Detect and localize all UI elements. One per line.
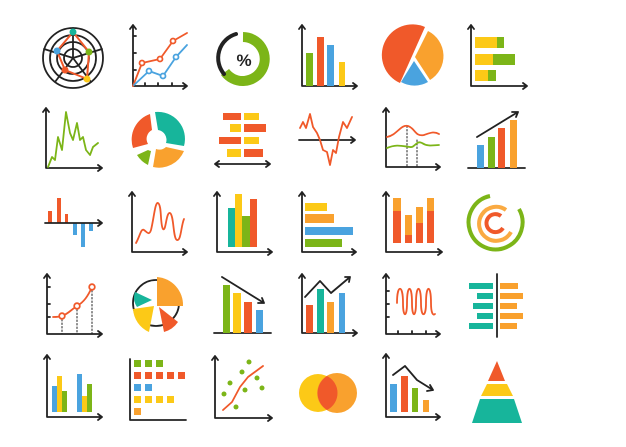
icon: bars with declining arrow xyxy=(383,354,440,420)
icon: bar chart xyxy=(299,25,357,89)
icon: horizontal bar chart xyxy=(299,192,356,255)
icon: clustered bars xyxy=(44,355,102,420)
icon: pyramid xyxy=(472,361,522,423)
icon: line chart two series xyxy=(130,25,187,89)
icon: radar chart xyxy=(43,28,103,88)
icon: sine wave chart xyxy=(383,274,440,337)
icon: growth curve with points xyxy=(44,274,102,337)
icon: pie chart xyxy=(382,24,443,86)
icon: bars with trend arrow xyxy=(299,274,357,336)
icon: positive negative bars xyxy=(45,198,102,247)
icon: square grid chart xyxy=(130,359,186,420)
icon: percent donut xyxy=(218,34,265,81)
icon: jagged line chart xyxy=(43,108,102,171)
icon: diverging bars xyxy=(469,274,523,337)
icon: segmented ring xyxy=(132,112,185,168)
icon: percent donut: % xyxy=(236,51,252,70)
icon: concentric arcs xyxy=(469,196,523,249)
icon: scatter plot xyxy=(212,356,272,421)
icon: two curves with guides xyxy=(383,108,440,170)
icon: brick bars xyxy=(215,113,270,167)
icon: stacked vertical bars xyxy=(383,192,442,255)
icon: exploded polar pie xyxy=(133,277,183,332)
icon: grouped bars xyxy=(214,192,272,255)
icon: venn diagram xyxy=(299,373,357,413)
icon: declining bars xyxy=(214,277,271,333)
icon: wave line chart xyxy=(129,192,187,255)
icon: stacked horizontal bars xyxy=(468,25,527,89)
icon: growth bars xyxy=(468,112,525,168)
icon: fluctuating line xyxy=(299,114,355,165)
